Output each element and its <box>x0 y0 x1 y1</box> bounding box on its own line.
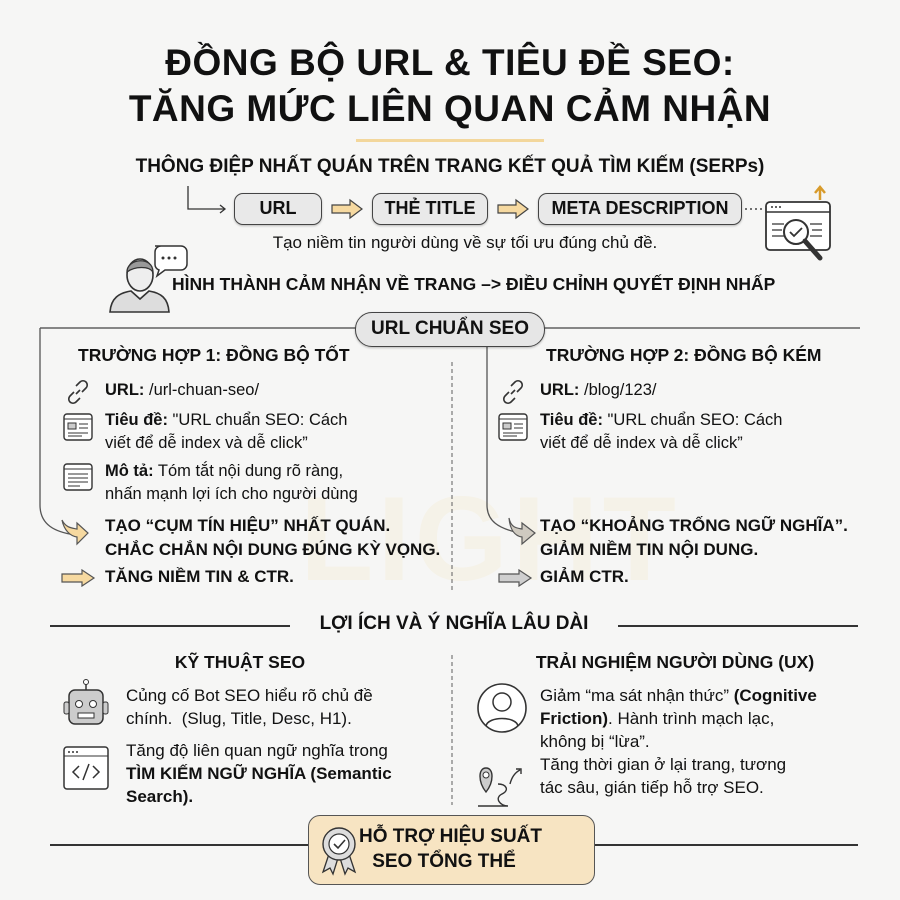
box: URL <box>234 193 322 225</box>
panel: case 1: TẠO “CỤM TÍN HIỆU” NHẤT QUÁN. <box>105 516 390 535</box>
callout: overall SEO: HỖ TRỢ HIỆU SUẤT <box>359 826 542 847</box>
panel: case 2: Tiêu đề: "URL chuẩn SEO: Cách <box>540 411 782 429</box>
panel: SEO technical: Search). <box>126 787 193 806</box>
icon: path pin <box>478 767 522 807</box>
section heading: benefits: LỢI ÍCH VÀ Ý NGHĨA LÂU DÀI <box>320 613 588 634</box>
panel: case 2: TẠO “KHOẢNG TRỐNG NGỮ NGHĨA”. <box>540 516 848 535</box>
pill: URL chuẩn SEO <box>355 312 545 347</box>
panel: UX: Giảm “ma sát nhận thức” (Cognitive <box>540 686 817 705</box>
icon: badge <box>322 827 356 876</box>
panel: SEO technical <box>63 652 392 806</box>
icon: title doc <box>498 413 528 441</box>
panel: SEO technical: chính. (Slug, Title, Desc, H1). <box>126 709 352 728</box>
box: URL: URL <box>260 198 296 218</box>
subheading: SERPs: THÔNG ĐIỆP NHẤT QUÁN TRÊN TRANG KẾT QUẢ TÌM KIẾM (SERPs) <box>136 156 764 177</box>
flow diagram <box>187 186 762 227</box>
icon: code window <box>63 746 109 790</box>
panel: case 1: Tiêu đề: "URL chuẩn SEO: Cách <box>105 411 347 429</box>
panel: case 2: GIẢM CTR. <box>540 567 629 586</box>
panel: UX: tác sâu, gián tiếp hỗ trợ SEO. <box>540 778 764 797</box>
heading: TRẢI NGHIỆM NGƯỜI DÙNG (UX) <box>536 652 814 672</box>
panel: SEO technical: Tăng độ liên quan ngữ nghĩa trong <box>126 741 388 760</box>
icon: description doc <box>63 463 93 491</box>
panel: UX <box>477 652 817 807</box>
panel: SEO technical: TÌM KIẾM NGỮ NGHĨA (Semantic <box>126 764 392 783</box>
arrow: yellow <box>61 520 89 546</box>
connectors for cases <box>39 327 860 590</box>
title: TĂNG MỨC LIÊN QUAN CẢM NHẬN <box>129 88 771 129</box>
panel: case 1: CHẮC CHẮN NỘI DUNG ĐÚNG KỲ VỌNG. <box>105 540 440 559</box>
heading case 2: TRƯỜNG HỢP 2: ĐỒNG BỘ KÉM <box>546 345 821 365</box>
callout: overall SEO <box>308 815 595 885</box>
text: perception: HÌNH THÀNH CẢM NHẬN VỀ TRANG –> ĐIỀU CHỈNH QUYẾT ĐỊNH NHẤP <box>172 274 775 294</box>
box: meta description <box>538 193 742 225</box>
pill: URL chuẩn SEO: URL CHUẨN SEO <box>371 318 529 339</box>
box: Thẻ title: THẺ TITLE <box>384 198 476 218</box>
panel: case 1: TĂNG NIỀM TIN & CTR. <box>105 567 294 586</box>
panel: case 2: URL: /blog/123/ <box>540 381 656 399</box>
icon: link <box>68 380 88 404</box>
panel: SEO technical: Củng cố Bot SEO hiểu rõ chủ đề <box>126 686 373 705</box>
icon: search browser <box>765 185 831 260</box>
text: trust: Tạo niềm tin người dùng về sự tối ưu đúng chủ đề. <box>273 233 657 252</box>
icon: user circle <box>477 683 527 733</box>
bottom line <box>50 844 858 846</box>
title <box>129 42 771 129</box>
box: meta description: META DESCRIPTION <box>551 198 728 218</box>
panel: case 1: Mô tả: Tóm tắt nội dung rõ ràng, <box>105 462 343 480</box>
panel: UX: không bị “lừa”. <box>540 732 650 751</box>
icon: robot <box>64 679 108 725</box>
panel: case 2: viết để dễ index và dễ click” <box>540 434 743 452</box>
panel: UX: Tăng thời gian ở lại trang, tương <box>540 755 786 774</box>
watermark: LIGHT <box>300 472 680 606</box>
title: ĐỒNG BỘ URL & TIÊU ĐỀ SEO: <box>165 42 735 83</box>
panel: case 1: URL: /url-chuan-seo/ <box>105 381 259 399</box>
icon: title doc <box>63 413 93 441</box>
panel: case 1: nhấn mạnh lợi ích cho người dùng <box>105 485 358 503</box>
arrow: grey <box>508 518 536 546</box>
callout: overall SEO: SEO TỔNG THỂ <box>372 851 516 872</box>
panel: case 2: GIẢM NIỀM TIN NỘI DUNG. <box>540 540 758 559</box>
panel: UX: Friction). Hành trình mạch lạc, <box>540 709 774 728</box>
panel: case 2 <box>498 345 848 587</box>
panel: case 1 <box>61 345 440 587</box>
icon: link <box>503 380 523 404</box>
icon: person with speech bubble <box>109 245 188 313</box>
heading: KỸ THUẬT SEO <box>175 652 305 672</box>
box: Thẻ title <box>372 193 488 225</box>
heading case 1: TRƯỜNG HỢP 1: ĐỒNG BỘ TỐT <box>78 345 350 365</box>
panel: case 1: viết để dễ index và dễ click” <box>105 434 308 452</box>
